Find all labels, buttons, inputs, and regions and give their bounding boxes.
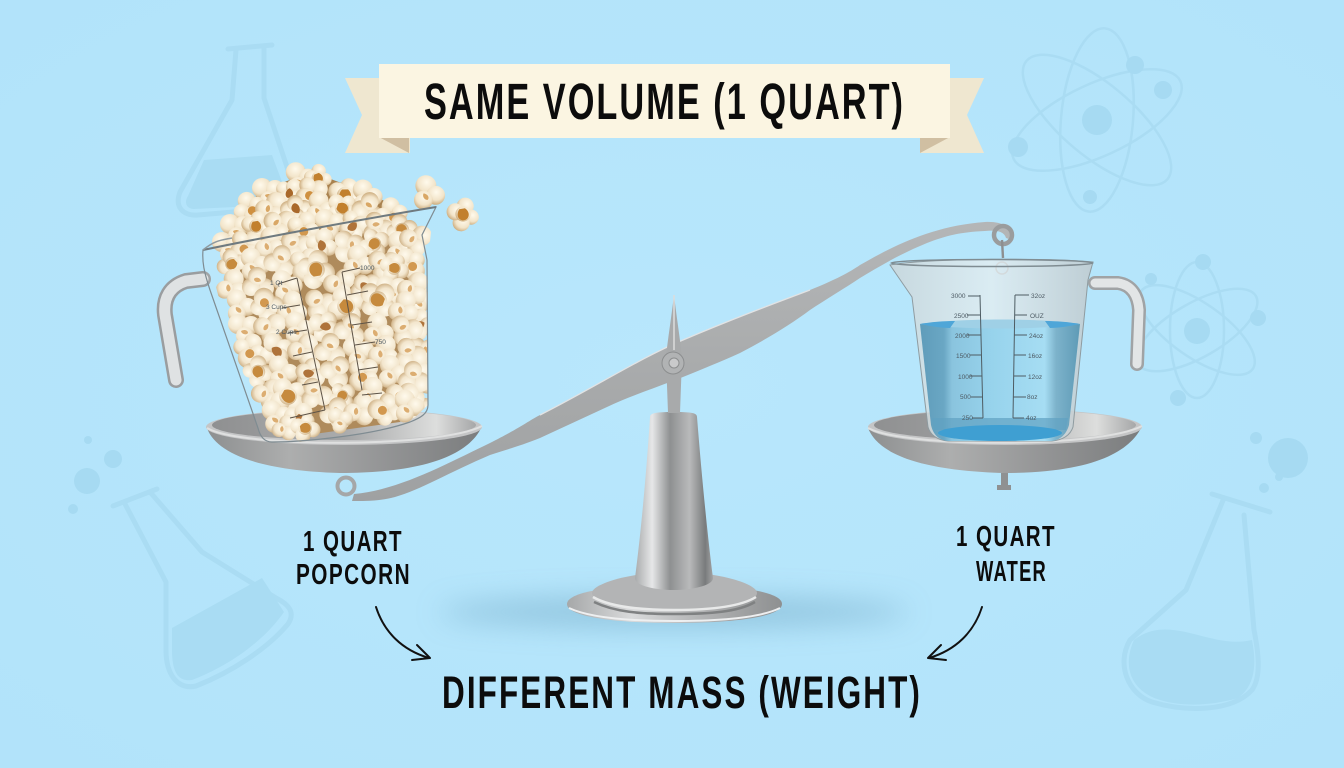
- icon: atom right: [1125, 254, 1269, 406]
- icon: flask lower right: [1124, 494, 1270, 708]
- label: 1 quart popcorn: POPCORN: [296, 559, 411, 591]
- label: 1 quart water: [956, 521, 1056, 588]
- left jug scale: [278, 268, 382, 418]
- balance stand: [567, 412, 782, 623]
- left measuring jug glass: 750: [375, 339, 386, 346]
- label: 1 quart popcorn: [296, 526, 411, 591]
- right measuring jug: 12oz: [1028, 374, 1042, 381]
- right measuring jug: 16oz: [1028, 353, 1042, 360]
- right jug scale: [967, 295, 1029, 418]
- base discs: [567, 585, 782, 623]
- left measuring jug glass: 1000: [360, 265, 375, 272]
- left measuring jug glass: 2 Cups: [276, 329, 297, 336]
- label: 1 quart popcorn: 1 QUART: [303, 526, 403, 558]
- icon: flask top left: [178, 45, 295, 215]
- icon: atom top right: [998, 25, 1196, 215]
- right measuring jug: 2500: [954, 313, 969, 320]
- right measuring jug: 8oz: [1027, 394, 1037, 401]
- label: 1 quart water: WATER: [976, 556, 1047, 588]
- right measuring jug: 500: [960, 394, 971, 401]
- bottom heading: DIFFERENT MASS (WEIGHT): [442, 667, 922, 718]
- right hook ring: [994, 226, 1012, 274]
- left pan: [206, 409, 482, 473]
- icon: bubbles right: [1250, 432, 1308, 493]
- icon: flask lower left: [113, 489, 291, 687]
- title text: SAME VOLUME (1 QUART): [424, 73, 905, 130]
- right measuring jug: 3000: [951, 293, 966, 300]
- pan stem: [997, 473, 1011, 490]
- right measuring jug: 1000: [958, 374, 973, 381]
- left jug handle: [165, 279, 203, 380]
- right measuring jug: 250: [962, 415, 973, 422]
- left measuring jug glass: [203, 207, 436, 442]
- right jug handle: [1095, 283, 1139, 364]
- scale beam: [338, 222, 1012, 501]
- water: [920, 320, 1080, 441]
- right pan: [868, 409, 1142, 490]
- column: [635, 412, 713, 590]
- arrow: water to mass: [928, 607, 982, 660]
- right measuring jug: 32oz: [1031, 293, 1045, 300]
- label: 1 quart water: 1 QUART: [956, 521, 1056, 553]
- arrow: popcorn to mass: [376, 607, 430, 660]
- right measuring jug: 4oz: [1026, 415, 1036, 422]
- stand shadow: [439, 597, 909, 627]
- title banner: [345, 64, 984, 153]
- popcorn: [211, 159, 482, 445]
- right measuring jug: 24oz: [1029, 333, 1043, 340]
- right measuring jug: 1500: [956, 353, 971, 360]
- flying kernels: [404, 171, 450, 217]
- right measuring jug: OUZ: [1030, 313, 1044, 320]
- icon: bubbles left: [68, 436, 122, 514]
- right measuring jug: [890, 259, 1093, 441]
- right measuring jug: 2000: [955, 333, 970, 340]
- left hook ring: [338, 478, 354, 494]
- left measuring jug glass: 3 Cups: [266, 304, 287, 311]
- left measuring jug glass: 1 Qt: [270, 280, 282, 287]
- pointer and pivot: [662, 295, 684, 413]
